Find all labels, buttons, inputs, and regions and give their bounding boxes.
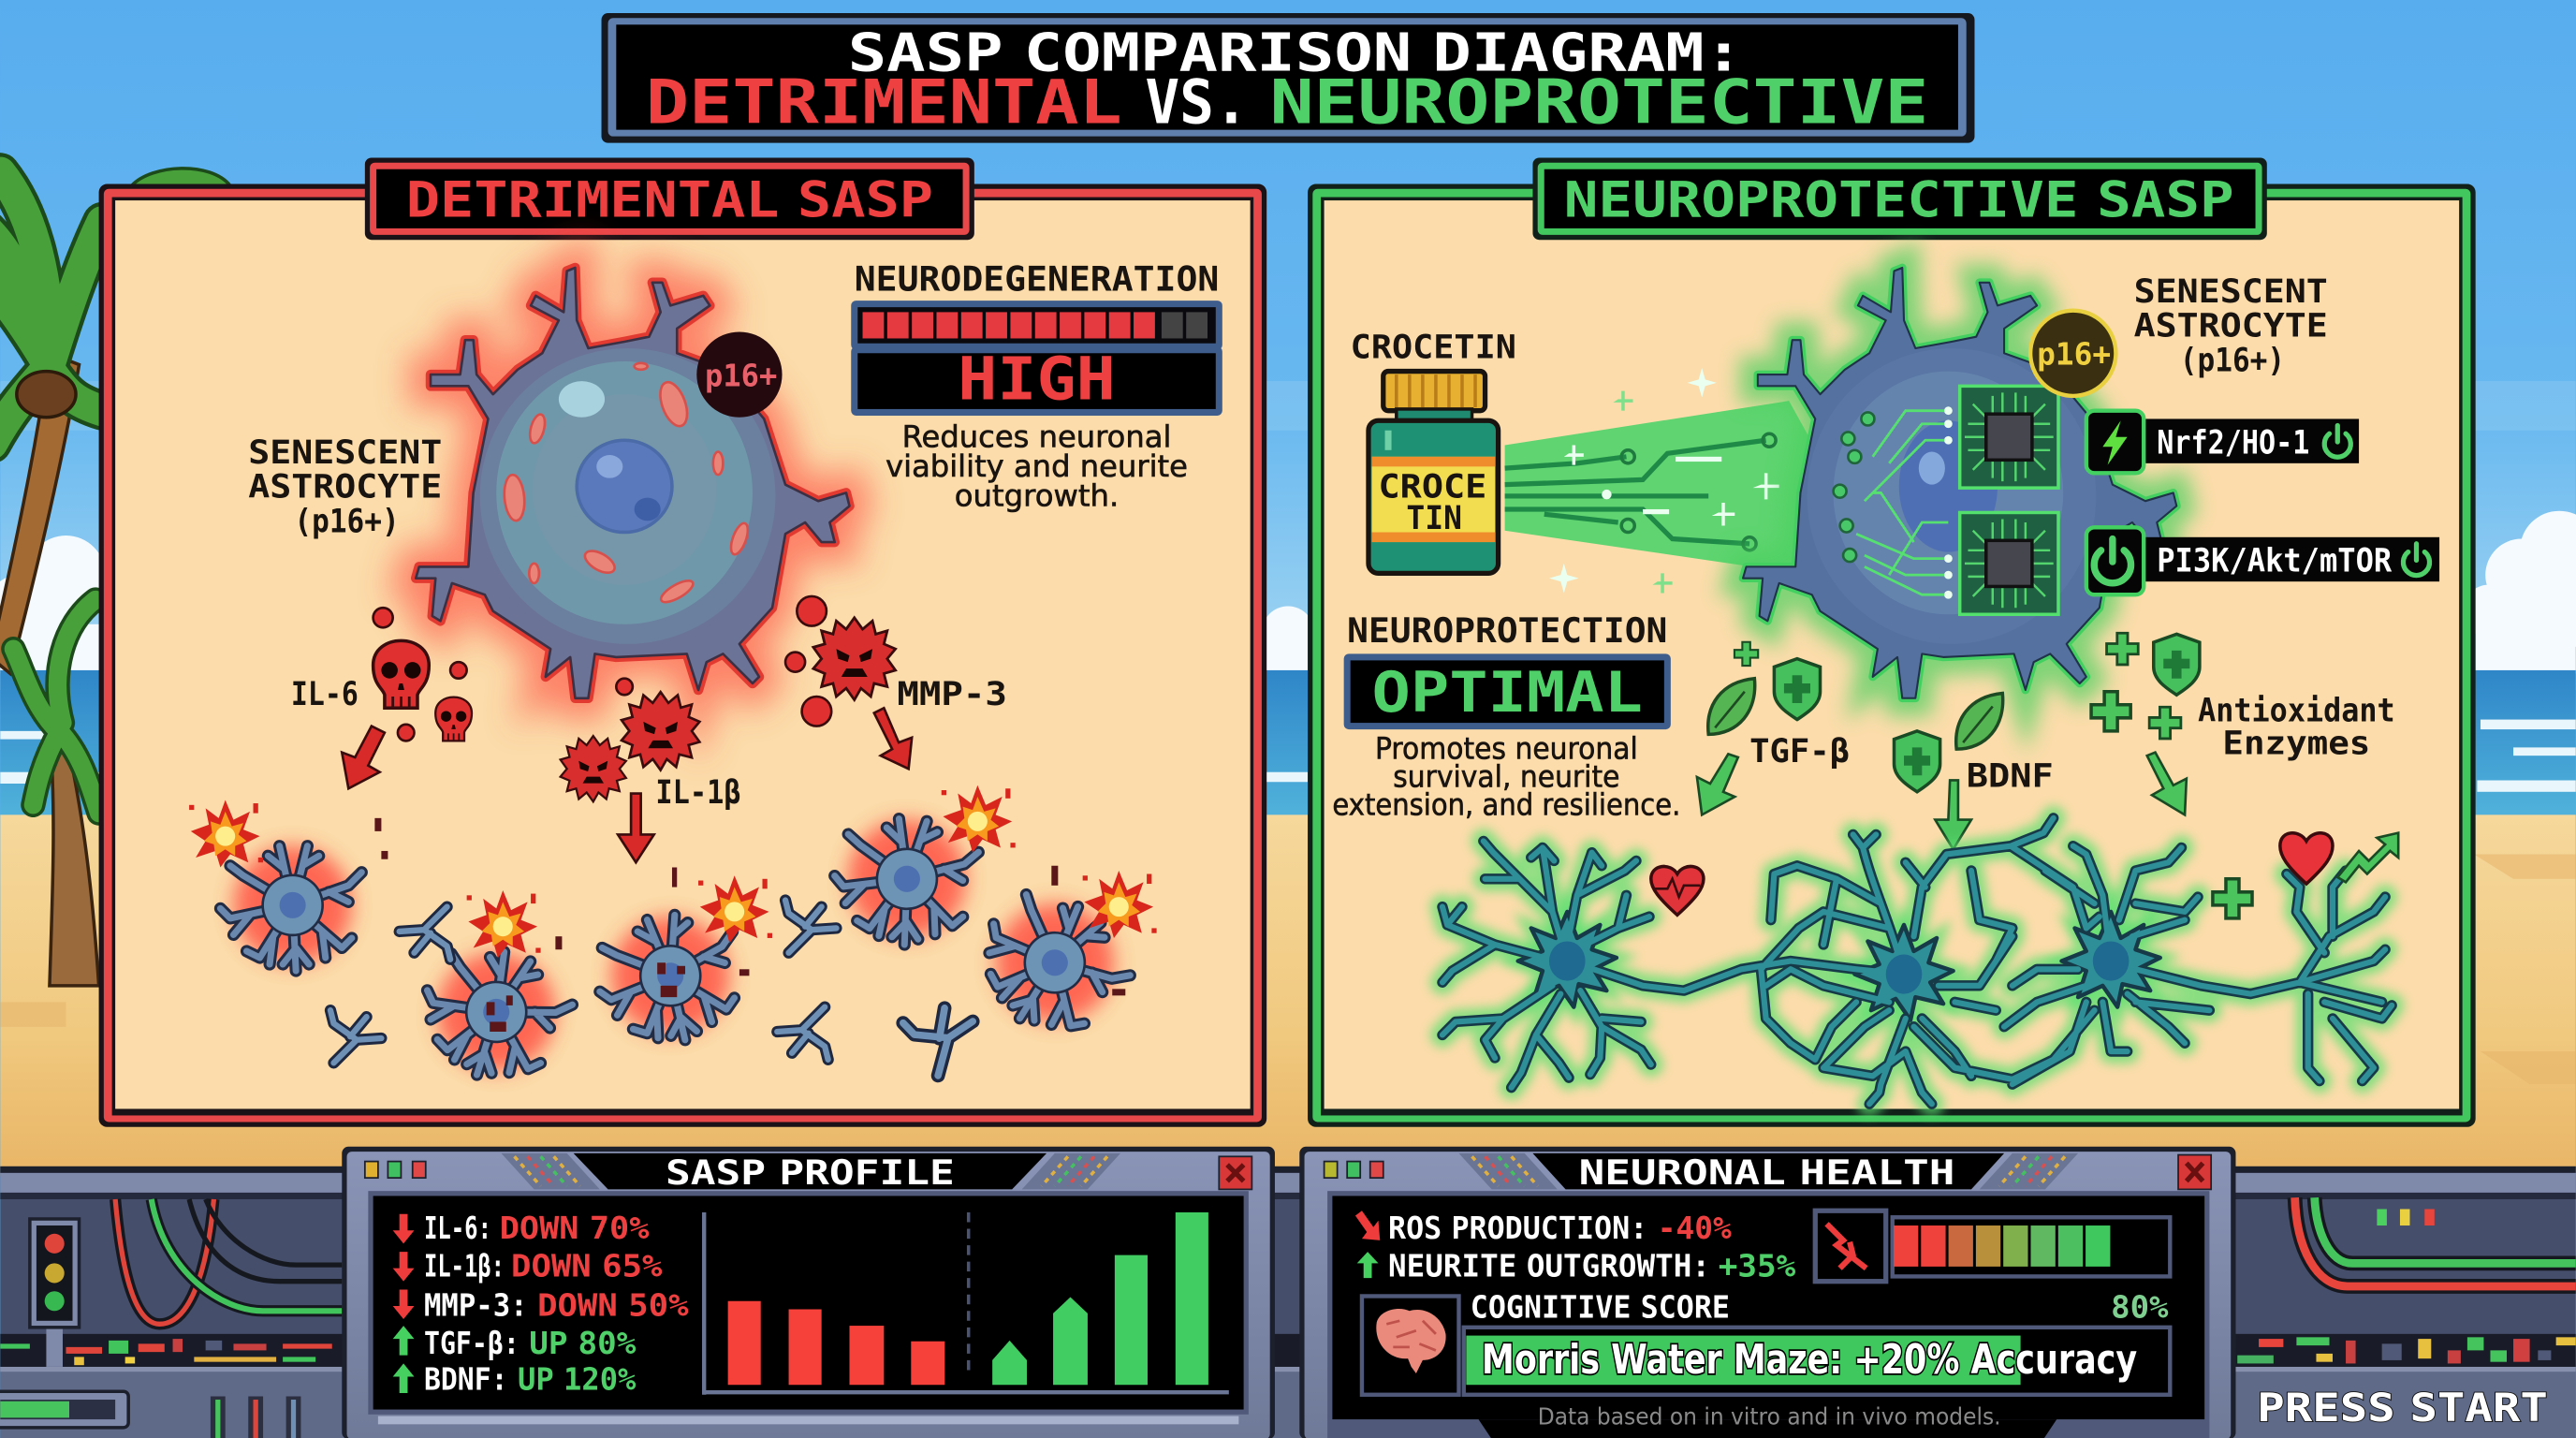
description: reduces viability bbox=[886, 420, 1188, 513]
label: IL-1β: IL-1β bbox=[655, 773, 741, 812]
badge: p16+ yellow: p16+ bbox=[2037, 336, 2111, 373]
title bar: NEURONAL HEALTH bbox=[1579, 1152, 1954, 1193]
icon: plus bbox=[2213, 879, 2252, 918]
label: antioxidant enzymes: Antioxidant bbox=[2198, 691, 2395, 729]
icon: traffic light bbox=[30, 1219, 80, 1367]
neurodegeneration meter: NEURODEGENERATION bbox=[855, 259, 1219, 300]
title: NEUROPROTECTIVE bbox=[1270, 68, 1928, 139]
label: PI3K/Akt/mTOR bbox=[2086, 527, 2439, 594]
palm trees bbox=[0, 169, 230, 986]
strip: left circuit bbox=[0, 1339, 332, 1365]
cognitive score bbox=[1464, 1288, 2170, 1395]
chip: bottom bbox=[1960, 512, 2058, 614]
title bbox=[602, 13, 1974, 143]
status LEDs bbox=[2377, 1209, 2435, 1225]
description: promotes survival bbox=[1332, 733, 1680, 822]
list: SASP changes: DOWN 50% bbox=[537, 1287, 689, 1324]
ROS gauge bbox=[1893, 1217, 2170, 1276]
description: reduces viability: Reduces neuronal bbox=[902, 420, 1171, 454]
arrow: IL-1β bbox=[618, 794, 654, 862]
damaged neurons bbox=[189, 785, 1157, 1097]
description: promotes survival: survival, neurite bbox=[1393, 761, 1619, 795]
left console: cables and gauges bbox=[115, 1199, 342, 1324]
list: SASP changes: BDNF: bbox=[424, 1360, 508, 1397]
title: DETRIMENTAL bbox=[646, 68, 1122, 139]
description: reduces viability: viability and neurite bbox=[886, 450, 1188, 484]
list: SASP changes: UP 80% bbox=[529, 1325, 636, 1361]
icon: brain bbox=[1362, 1296, 1458, 1395]
description: promotes survival: extension, and resilience. bbox=[1332, 788, 1680, 822]
title: VS. bbox=[1145, 68, 1249, 139]
arrow: MMP-3 bbox=[874, 708, 912, 769]
description: reduces viability: outgrowth. bbox=[955, 479, 1119, 513]
arrow: TGF-β bbox=[1697, 754, 1738, 814]
badge: p16+ bbox=[696, 331, 783, 418]
vertical tubes bbox=[211, 1397, 300, 1438]
heading: detrimental bbox=[365, 157, 974, 240]
heading: neuroprotective: NEUROPROTECTIVE SASP bbox=[1564, 172, 2234, 229]
icon: heart bbox=[2280, 833, 2333, 884]
footnote: Data based on in vitro and in vivo models. bbox=[1538, 1402, 2001, 1430]
metric: neurite outgrowth: NEURITE OUTGROWTH: bbox=[1388, 1247, 1710, 1284]
senescent astrocyte with chips bbox=[1743, 268, 2176, 698]
title: SASP COMPARISON DIAGRAM: bbox=[848, 22, 1743, 83]
title bar: SASP PROFILE bbox=[666, 1152, 955, 1193]
label: PI3K/Akt/mTOR: PI3K/Akt/mTOR bbox=[2157, 542, 2393, 580]
arrow: BDNF bbox=[1935, 780, 1971, 849]
list: SASP changes: IL-1β: bbox=[424, 1247, 505, 1284]
bottle: crocetin: CROCE bbox=[1379, 468, 1486, 506]
metric: ROS production: ROS PRODUCTION: bbox=[1388, 1210, 1647, 1246]
list: SASP changes: DOWN 65% bbox=[511, 1247, 662, 1284]
right console: cables bbox=[2295, 1197, 2576, 1286]
panel: neuroprotective SASP bbox=[1308, 157, 2476, 1127]
icons: protective factors bbox=[1708, 633, 2200, 792]
metric: neurite outgrowth: +35% bbox=[1719, 1247, 1795, 1284]
neurodegeneration meter: HIGH bbox=[958, 344, 1116, 413]
bar chart bbox=[703, 1212, 1229, 1395]
press start: PRESS START bbox=[2257, 1385, 2548, 1431]
beam: crocetin bbox=[1505, 401, 1840, 573]
window: neuronal health bbox=[1299, 1147, 2235, 1438]
title bar bbox=[1325, 1152, 2211, 1193]
strip: right circuit bbox=[2237, 1337, 2576, 1363]
title bar bbox=[365, 1152, 1251, 1193]
label: senescent astrocyte: ASTROCYTE bbox=[2134, 307, 2328, 345]
label: crocetin: CROCETIN bbox=[1351, 329, 1516, 367]
neuroprotection meter bbox=[1344, 610, 1671, 729]
sparkles bbox=[1549, 368, 1717, 593]
label: Nrf2/HO-1: Nrf2/HO-1 bbox=[2157, 423, 2309, 462]
healthy neuron network bbox=[1442, 818, 2392, 1104]
bottle: crocetin bbox=[1368, 372, 1499, 573]
label: BDNF: BDNF bbox=[1967, 757, 2054, 796]
bottle: crocetin: TIN bbox=[1406, 499, 1462, 537]
icon: heart with pulse bbox=[1651, 866, 1704, 915]
metric: ROS production: -40% bbox=[1658, 1210, 1732, 1246]
arrow: IL-6 bbox=[342, 726, 385, 788]
cytokines: skulls and viruses bbox=[373, 596, 896, 801]
list: SASP changes: DOWN 70% bbox=[500, 1210, 649, 1246]
label: TGF-β: TGF-β bbox=[1749, 732, 1850, 770]
icon: left gauge bbox=[0, 1391, 128, 1428]
cognitive score: COGNITIVE SCORE bbox=[1471, 1288, 1730, 1325]
label: senescent astrocyte: (p16+) bbox=[294, 503, 400, 541]
list: SASP changes: MMP-3: bbox=[424, 1287, 528, 1324]
label: senescent astrocyte: (p16+) bbox=[2180, 342, 2285, 380]
clouds bbox=[0, 511, 2576, 673]
label: IL-6: IL-6 bbox=[291, 675, 359, 713]
label: senescent astrocyte bbox=[248, 433, 442, 541]
label: MMP-3: MMP-3 bbox=[897, 675, 1007, 713]
console base bbox=[0, 1167, 2576, 1438]
neurodegeneration meter bbox=[851, 259, 1222, 416]
list: SASP changes bbox=[393, 1210, 689, 1397]
icon: ROS down bbox=[1815, 1211, 1886, 1282]
senescent astrocyte cell bbox=[416, 268, 849, 698]
chip: top bbox=[1960, 386, 2058, 488]
label: senescent astrocyte: SENESCENT bbox=[248, 433, 442, 472]
list: SASP changes: UP 120% bbox=[518, 1360, 636, 1397]
cognitive score: Morris Water Maze: +20% Accuracy bbox=[1482, 1336, 2137, 1384]
heading: detrimental: DETRIMENTAL SASP bbox=[406, 172, 933, 229]
cognitive score: 80% bbox=[2111, 1288, 2169, 1325]
label: senescent astrocyte bbox=[2134, 272, 2328, 380]
circuit traces bbox=[1856, 411, 1948, 594]
surf bbox=[0, 720, 2576, 792]
list: SASP changes: IL-6: bbox=[424, 1210, 491, 1246]
label: antioxidant enzymes: Enzymes bbox=[2222, 724, 2370, 762]
list: SASP changes: TGF-β: bbox=[424, 1325, 520, 1361]
label: senescent astrocyte: ASTROCYTE bbox=[248, 468, 442, 506]
window: SASP profile bbox=[342, 1147, 1275, 1438]
badge: p16+ yellow bbox=[2030, 311, 2115, 396]
badge: p16+: p16+ bbox=[705, 357, 777, 393]
label: senescent astrocyte: SENESCENT bbox=[2134, 272, 2328, 311]
label: antioxidant enzymes bbox=[2198, 691, 2395, 762]
panel: detrimental SASP bbox=[99, 157, 1266, 1127]
label: Nrf2/HO-1 bbox=[2086, 411, 2359, 473]
icon: growth arrow bbox=[2337, 833, 2398, 882]
neuroprotection meter: NEUROPROTECTION bbox=[1347, 610, 1667, 651]
arrow: antioxidant bbox=[2147, 753, 2187, 814]
neuroprotection meter: OPTIMAL bbox=[1371, 661, 1643, 726]
heading: neuroprotective bbox=[1532, 157, 2267, 240]
description: promotes survival: Promotes neuronal bbox=[1375, 733, 1638, 767]
